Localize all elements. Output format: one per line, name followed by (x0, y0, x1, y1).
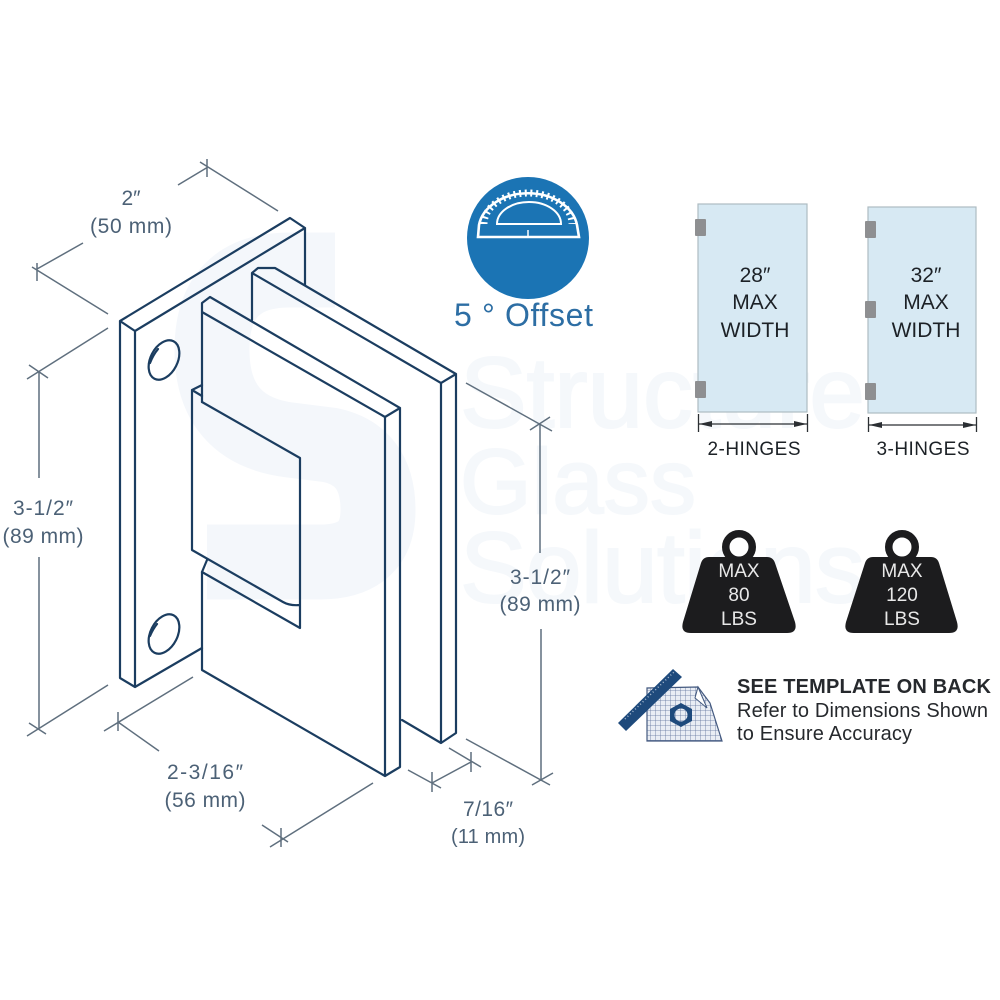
top hinge (695, 219, 706, 236)
wall plate (120, 218, 305, 687)
text block: see template on back (737, 676, 992, 745)
bottom hinge (865, 383, 876, 400)
width arrow (698, 414, 808, 432)
dimension: bottom width 2-3/16 inch: (56 mm) (164, 789, 246, 812)
door width text: 32″ (911, 264, 942, 287)
watermark: Structure Glass Solutions logo: Glass (460, 431, 696, 533)
icon: template with ruler and nut (618, 669, 722, 741)
icon: weight max 120 lbs: MAX (881, 561, 923, 582)
dimension: width 2 inch (32, 159, 278, 314)
panel: 32 inch door, 3 hinges (865, 207, 977, 460)
middle hinge (865, 301, 876, 318)
dimension: bottom width 2-3/16 inch: 2-3/16″ (167, 761, 244, 784)
text block: see template on back: SEE TEMPLATE ON BACK (737, 676, 992, 698)
dimension: bottom width 2-3/16 inch (104, 677, 373, 847)
front glass clamp plate (202, 297, 400, 776)
panel: 28 inch door, 2 hinges (695, 204, 808, 460)
door width text: WIDTH (892, 319, 960, 342)
icon: protractor badge (467, 177, 589, 299)
icon: weight max 80 lbs (682, 534, 796, 633)
text block: see template on back: Refer to Dimensions Shown (737, 700, 988, 722)
dimension: left height 3-1/2 inch: 3-1/2″ (13, 497, 74, 520)
door width text (892, 264, 960, 342)
hinge line drawing (120, 218, 456, 776)
top hinge (865, 221, 876, 238)
door width text (721, 264, 789, 342)
dimension: right height 3-1/2 inch (466, 383, 580, 785)
rear glass clamp plate (252, 268, 456, 743)
watermark: Structure Glass Solutions logo: Structure (460, 337, 865, 449)
dimension: left height 3-1/2 inch: (89 mm) (2, 525, 84, 548)
watermark: Structure Glass Solutions logo (207, 270, 865, 624)
watermark: Structure Glass Solutions logo: Solutions (460, 512, 865, 624)
icon: weight max 80 lbs: MAX (718, 561, 760, 582)
door width text: 28″ (740, 264, 771, 287)
door width text: MAX (903, 291, 949, 314)
dimension: width 2 inch: 2″ (121, 187, 141, 210)
icon: weight max 80 lbs: LBS (721, 609, 757, 630)
hinge count label: 2-HINGES (708, 439, 800, 460)
dimension: thickness 7/16 inch: (11 mm) (451, 826, 525, 848)
hinge knuckle (192, 385, 300, 628)
icon: weight max 120 lbs (845, 534, 958, 633)
width arrow (868, 417, 977, 432)
dimension: left height 3-1/2 inch (2, 328, 108, 736)
door width text: MAX (732, 291, 778, 314)
dimension: right height 3-1/2 inch: (89 mm) (500, 593, 580, 616)
dimension: thickness 7/16 inch: 7/16″ (463, 798, 514, 821)
icon: weight max 120 lbs: LBS (884, 609, 920, 630)
label: 5 degree offset: 5 ° Offset (454, 297, 593, 333)
glass door (868, 207, 976, 413)
dimension: width 2 inch: (50 mm) (90, 215, 172, 238)
upper mounting hole (142, 335, 186, 385)
text block: see template on back: to Ensure Accuracy (737, 723, 912, 745)
lower mounting hole (142, 609, 186, 659)
bottom hinge (695, 381, 706, 398)
glass door (698, 204, 807, 412)
icon: weight max 120 lbs: 120 (886, 585, 918, 606)
dimension: thickness 7/16 inch (408, 748, 525, 848)
icon: weight max 80 lbs: 80 (728, 585, 750, 606)
door width text: WIDTH (721, 319, 789, 342)
hinge count label: 3-HINGES (876, 439, 970, 460)
dimension: right height 3-1/2 inch: 3-1/2″ (510, 566, 571, 589)
